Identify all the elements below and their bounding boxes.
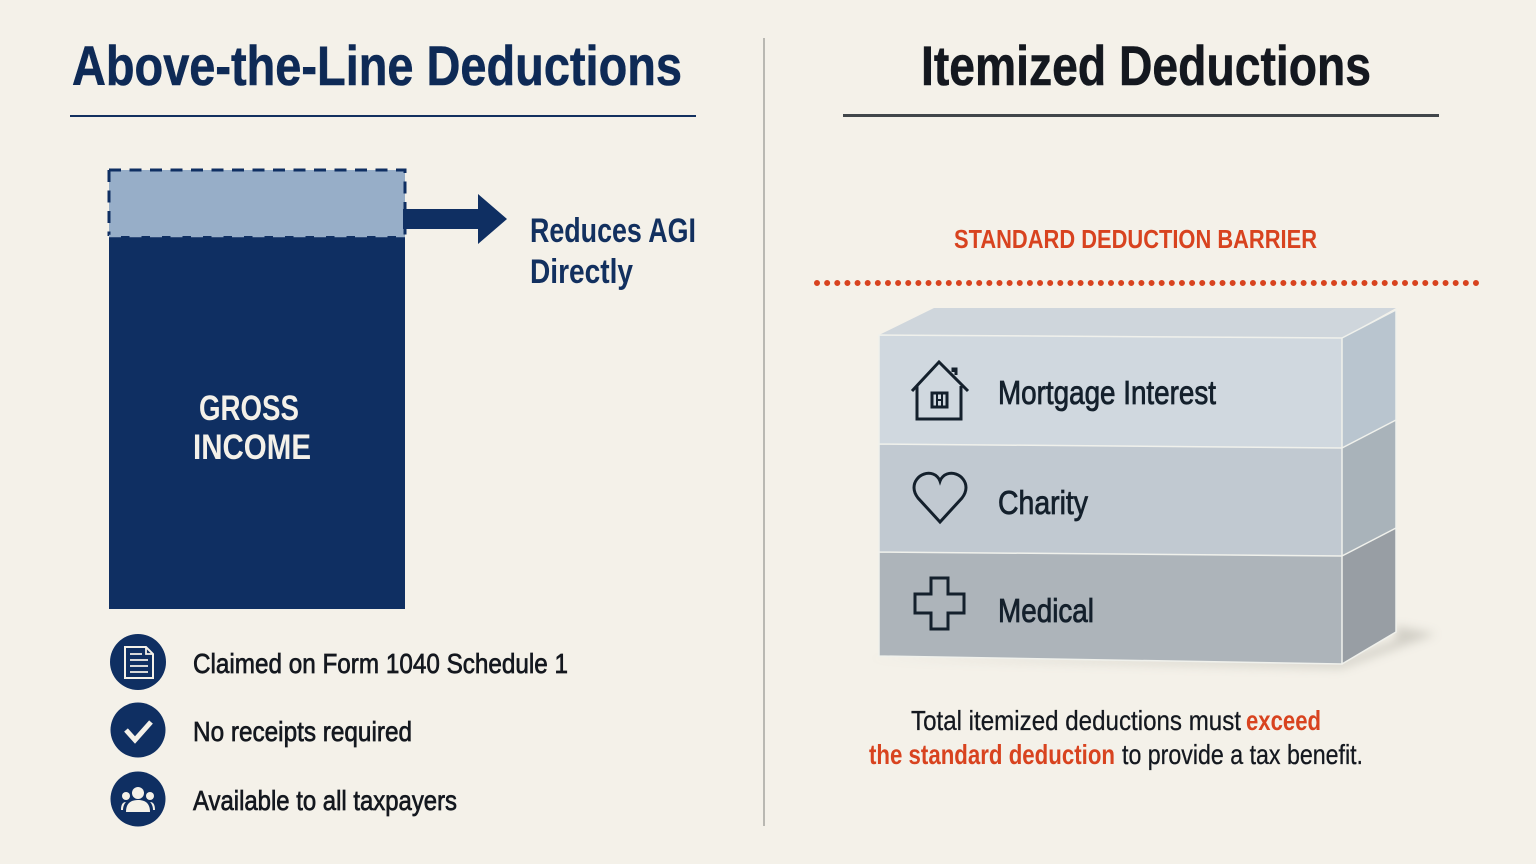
caption: to provide a tax benefit.: [1122, 739, 1363, 770]
barrier dotted line: [817, 280, 1479, 286]
dashed deduction slice: [109, 170, 405, 236]
bar: gross income: INCOME: [193, 428, 311, 467]
list item: no receipts: No receipts required: [193, 716, 412, 747]
icon: people: [110, 772, 166, 826]
stacked block chart: [866, 308, 1436, 668]
icon: medical cross: [915, 578, 964, 629]
block top face: [879, 308, 1396, 338]
list item: no receipts: [110, 702, 412, 758]
label: reduces AGI directly: Reduces AGI: [530, 212, 696, 250]
block shadow: [866, 626, 1436, 668]
arrow: reduces AGI: [403, 194, 507, 244]
label: reduces AGI directly: [530, 212, 696, 291]
heading: above-the-line deductions: Above-the-Line Deductions: [72, 34, 682, 97]
layer: medical: Medical: [998, 592, 1094, 629]
icon: check mark: [110, 702, 166, 758]
list item: form 1040: [110, 634, 568, 690]
panel: itemized deductions: [817, 34, 1479, 770]
layer: mortgage interest: [879, 310, 1396, 448]
icon: heart: [914, 473, 966, 522]
bar: gross income: GROSS: [199, 389, 299, 428]
layer: medical: [879, 528, 1396, 664]
panel: above-the-line deductions: [70, 34, 696, 826]
list item: form 1040: Claimed on Form 1040 Schedule 1: [193, 648, 568, 679]
layer: charity: Charity: [998, 484, 1088, 521]
layer: mortgage interest: Mortgage Interest: [998, 374, 1216, 411]
layer: charity: [879, 420, 1396, 556]
label: standard deduction barrier: STANDARD DEDUCTION BARRIER: [954, 224, 1317, 254]
bar: gross income: [109, 236, 405, 609]
icon: document: [110, 634, 166, 690]
caption: the standard deduction: [869, 739, 1115, 770]
label: reduces AGI directly: Directly: [530, 253, 633, 291]
list item: all taxpayers: Available to all taxpayers: [193, 785, 457, 816]
caption: [869, 705, 1363, 770]
caption: Total itemized deductions must: [911, 705, 1241, 736]
list item: all taxpayers: [110, 772, 457, 826]
heading: itemized deductions: Itemized Deductions: [921, 34, 1371, 97]
icon: house: [912, 362, 968, 419]
caption: exceed: [1246, 705, 1321, 736]
heading: itemized deductions: [843, 34, 1439, 117]
